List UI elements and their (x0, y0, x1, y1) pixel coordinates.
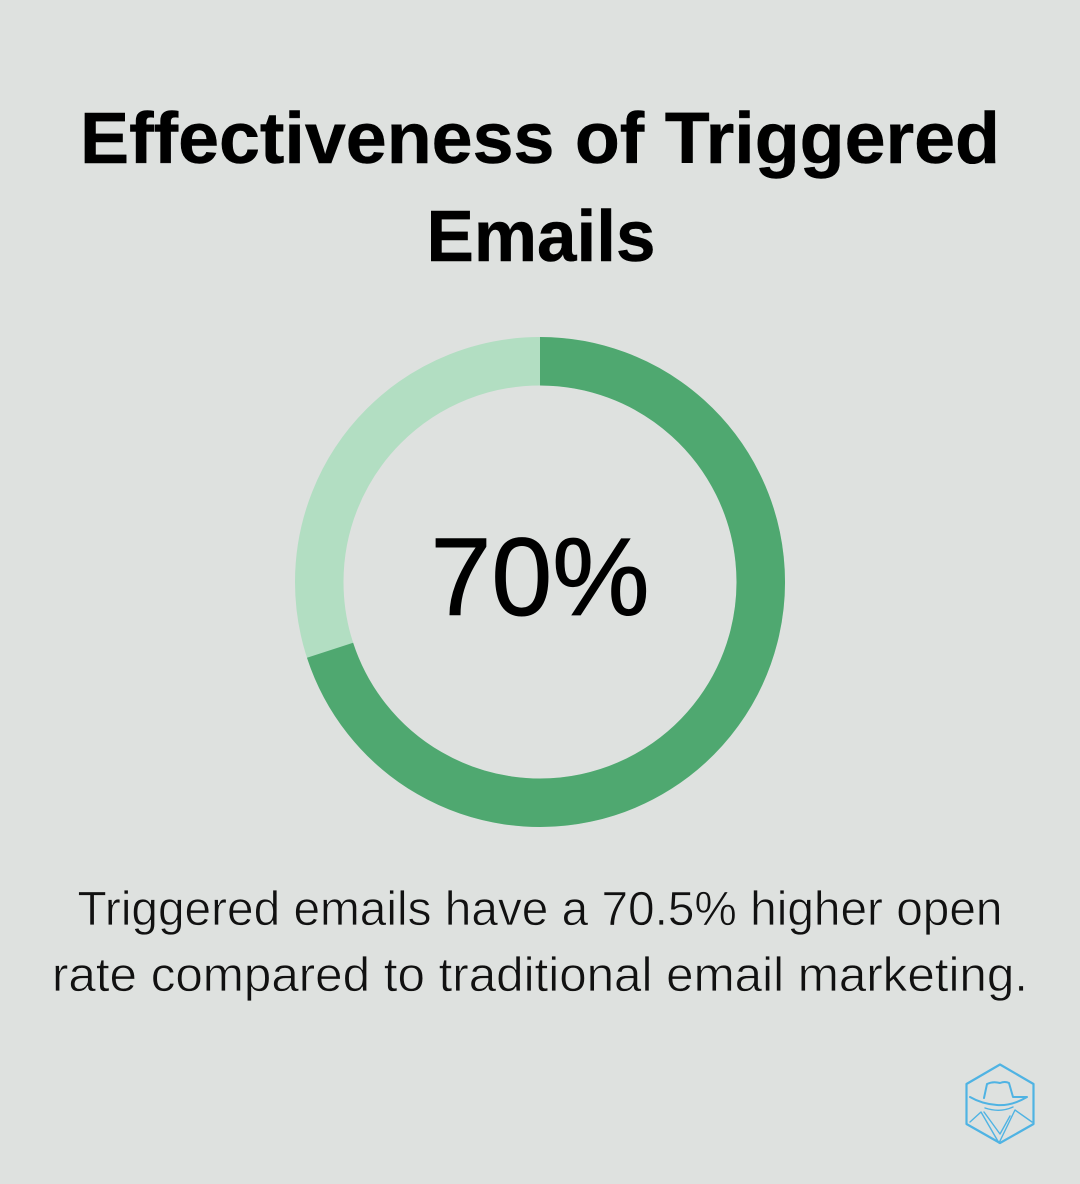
description text (52, 883, 1028, 1002)
donut track: remaining share (319, 361, 761, 803)
icon: spy logo in hexagon (966, 1064, 1034, 1143)
center value: 70% (430, 516, 650, 639)
logo hat (970, 1082, 1027, 1105)
description text: Triggered emails have a 70.5% higher open (78, 883, 1002, 936)
title: Effectiveness of Triggered (80, 99, 1000, 179)
donut arc: 70% share (330, 361, 761, 803)
logo coat collar (970, 1110, 1032, 1143)
logo brim shadow (985, 1107, 1013, 1110)
title: Emails (426, 197, 656, 277)
title (80, 99, 1000, 277)
logo hexagon outline (966, 1064, 1034, 1143)
donut chart: 70% (319, 361, 761, 803)
description text: rate compared to traditional email marketing. (52, 949, 1028, 1002)
